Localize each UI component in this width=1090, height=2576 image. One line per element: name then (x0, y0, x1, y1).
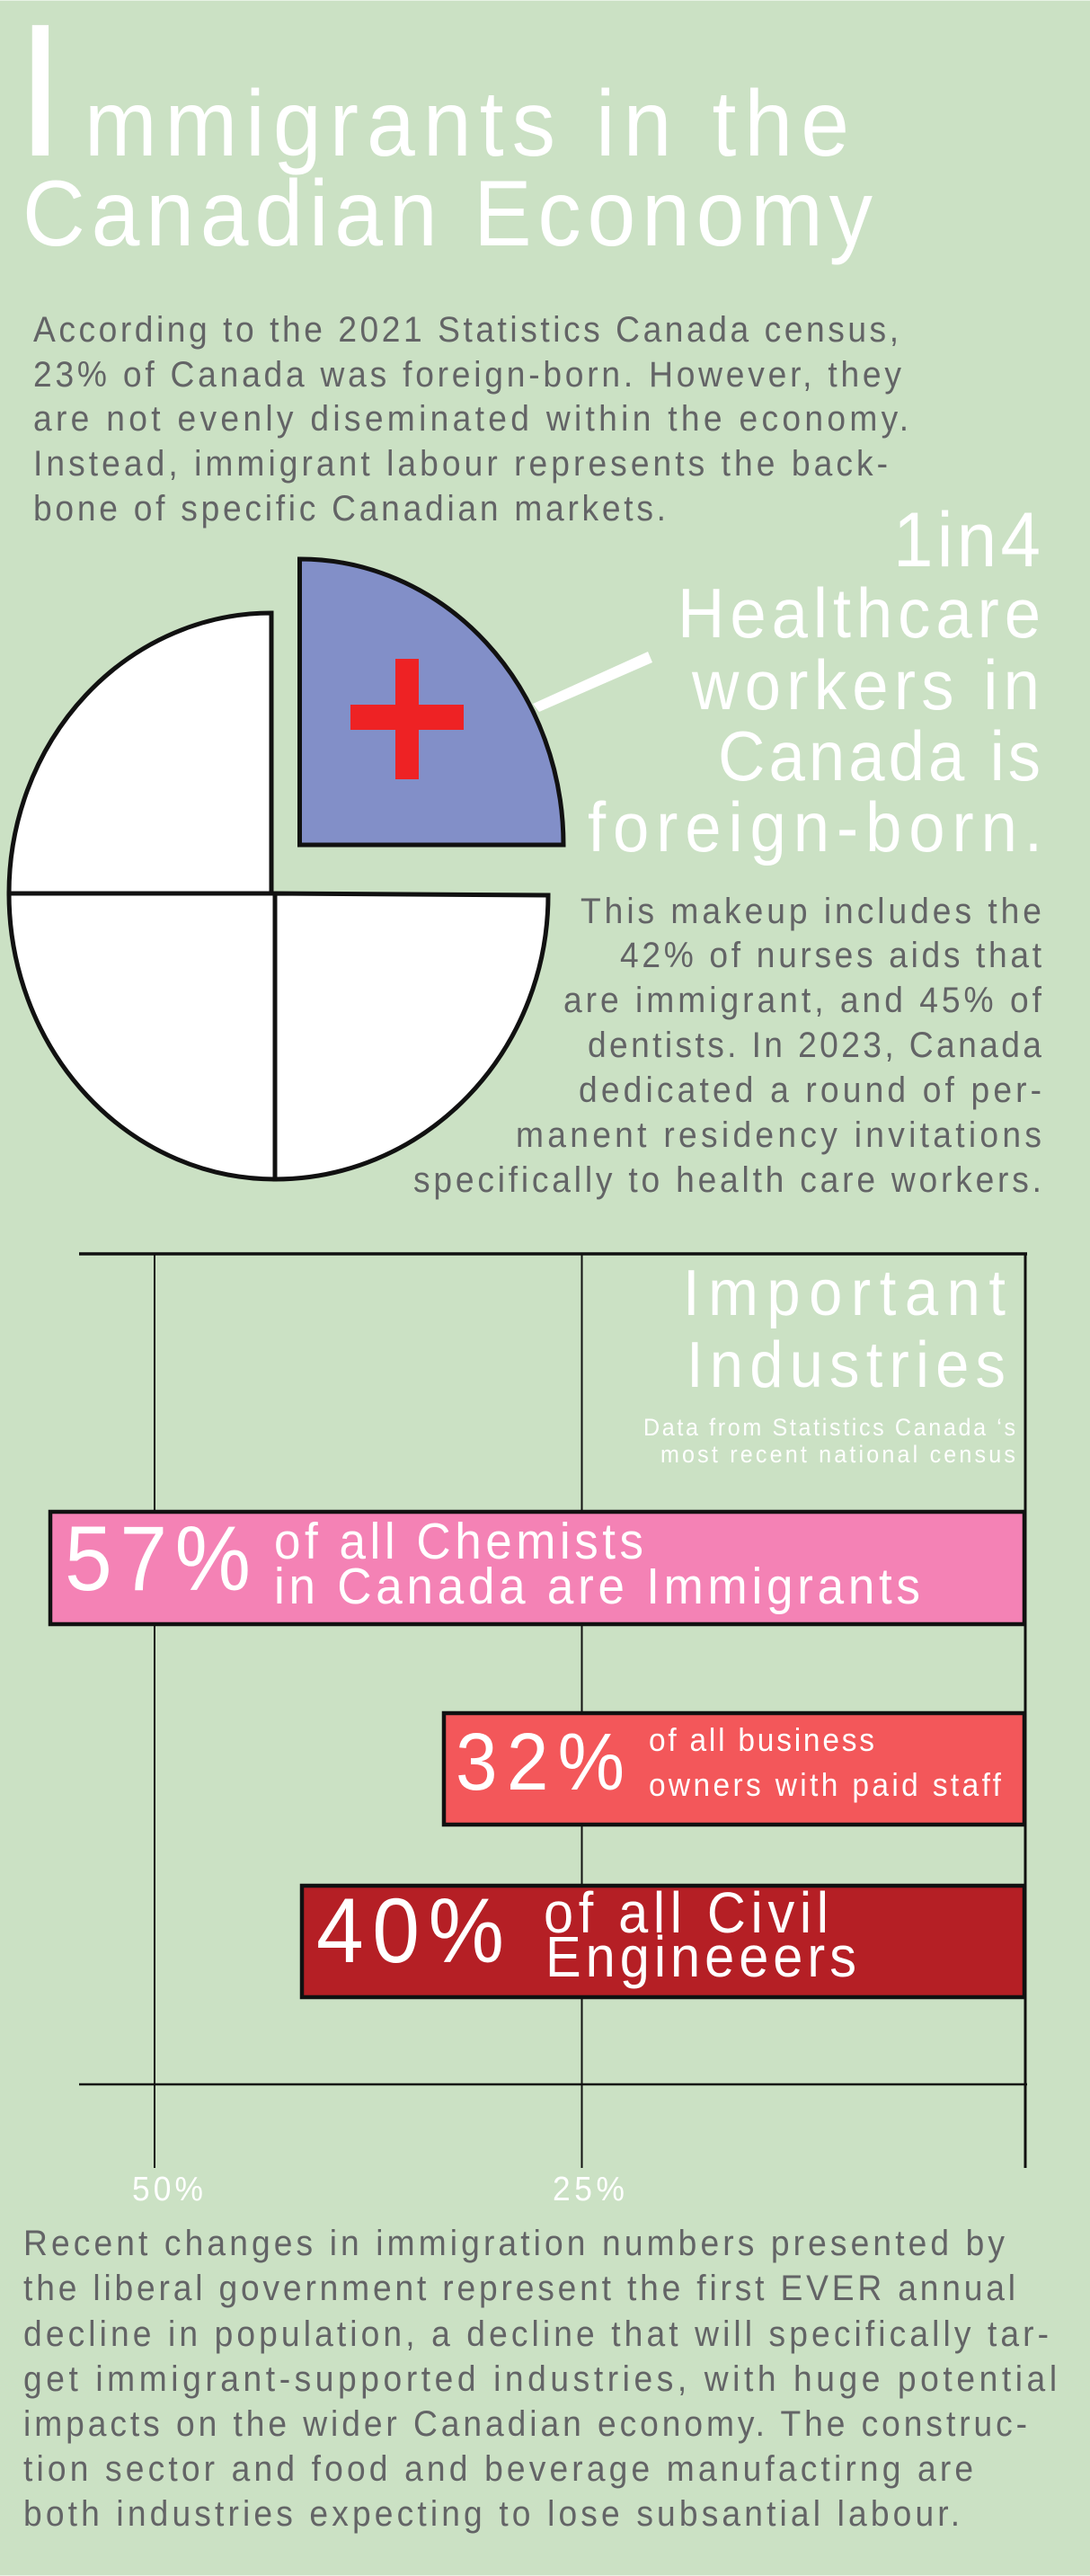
bar: business owners 32%: 32% (456, 1717, 625, 1808)
icon: red medical cross (350, 659, 464, 779)
bar: civil engineers 40% (302, 1879, 1024, 1997)
intro text block: 23% of Canada was foreign-born. However, they (33, 355, 902, 395)
callout: 1 in 4 healthcare workers: workers in (691, 646, 1040, 724)
closing text block: the liberal government represent the first EVER annual (23, 2269, 1015, 2308)
chart heading (683, 1257, 1006, 1401)
closing text block: decline in population, a decline that will specifically tar- (23, 2314, 1049, 2354)
title: Canadian Economy (22, 162, 873, 266)
callout: 1 in 4 healthcare workers (588, 496, 1042, 866)
closing text block: Recent changes in immigration numbers presented by (23, 2224, 1006, 2263)
callout: 1 in 4 healthcare workers: 1in4 (893, 496, 1041, 583)
closing text block: impacts on the wider Canadian economy. The construc- (23, 2404, 1027, 2444)
intro text block: According to the 2021 Statistics Canada census, (33, 310, 899, 350)
bar: civil engineers 40%: of all Civil (544, 1881, 829, 1945)
title (16, 0, 873, 266)
bar: chemists 57%: of all Chemists (274, 1512, 643, 1569)
bar: chemists 57%: in Canada are Immigrants (274, 1557, 920, 1614)
callout: 1 in 4 healthcare workers: Canada is (718, 717, 1041, 795)
chart source note (643, 1413, 1015, 1468)
healthcare detail text: are immigrant, and 45% of (563, 981, 1041, 1020)
title: mmigrants in the (84, 72, 849, 176)
chart source note: Data from Statistics Canada ‘s (643, 1413, 1015, 1441)
callout: 1 in 4 healthcare workers: Healthcare (678, 574, 1041, 653)
pie slice: upper left (9, 613, 271, 893)
bar: business owners 32%: of all business (649, 1723, 874, 1758)
healthcare detail text: dedicated a round of per- (579, 1070, 1041, 1110)
bar: business owners 32%: owners with paid staff (649, 1768, 1001, 1803)
axis label: 50%: 50% (132, 2170, 203, 2207)
bar: chemists 57%: 57% (65, 1507, 251, 1610)
bar: chemists 57% (50, 1507, 1024, 1624)
chart heading: Industries (687, 1328, 1006, 1401)
pie chart: one in four (9, 559, 563, 1179)
healthcare detail text: manent residency invitations (516, 1115, 1041, 1155)
pie slice: lower left (9, 893, 275, 1179)
closing text block: both industries expecting to lose subsantial labour. (23, 2494, 960, 2534)
bar: civil engineers 40%: 40% (316, 1879, 504, 1982)
closing text block: get immigrant-supported industries, with huge potential (23, 2359, 1057, 2399)
chart heading: Important (683, 1257, 1006, 1329)
intro text block (33, 310, 908, 529)
intro text block: bone of specific Canadian markets. (33, 489, 666, 529)
chart source note: most recent national census (660, 1440, 1015, 1468)
axis label: 25%: 25% (553, 2170, 625, 2207)
intro text block: Instead, immigrant labour represents the back- (33, 444, 888, 484)
healthcare detail text (413, 892, 1041, 1200)
bar chart: important industries (50, 1254, 1027, 2207)
healthcare detail text: This makeup includes the (580, 892, 1041, 931)
pie slice: lower right (275, 893, 548, 1179)
intro text block: are not evenly diseminated within the economy. (33, 399, 908, 439)
bar: civil engineers 40%: Engineeers (545, 1925, 856, 1989)
chart grid (79, 1254, 1027, 2168)
callout: 1 in 4 healthcare workers: foreign-born. (588, 788, 1042, 866)
pointer line from pie slice to callout (533, 652, 652, 712)
bar: business owners 32% (444, 1713, 1024, 1825)
pie slice: healthcare highlight (300, 559, 563, 845)
healthcare detail text: dentists. In 2023, Canada (588, 1026, 1041, 1065)
healthcare detail text: specifically to health care workers. (413, 1160, 1041, 1200)
closing text block (23, 2224, 1057, 2534)
healthcare detail text: 42% of nurses aids that (620, 936, 1041, 975)
closing text block: tion sector and food and beverage manufactirng are (23, 2449, 973, 2489)
